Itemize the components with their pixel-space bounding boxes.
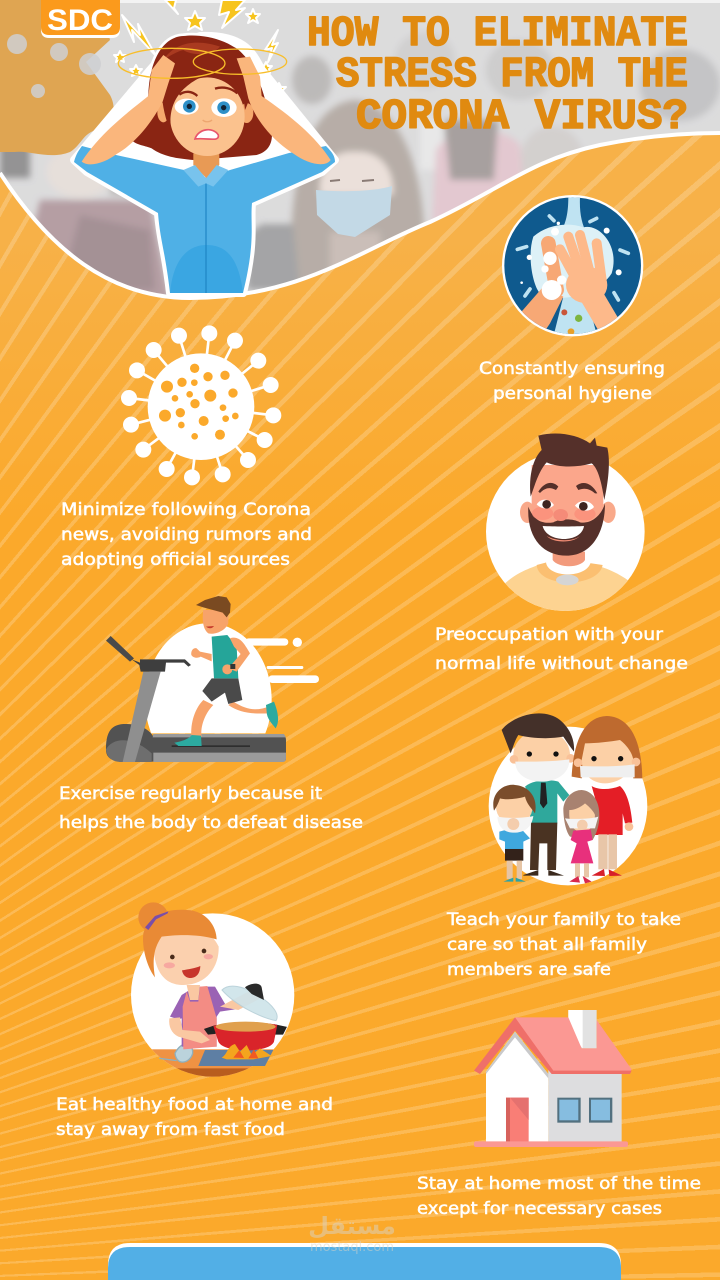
icon: corona virus [122,327,280,484]
dizzy rings [118,48,287,78]
text [56,1095,333,1140]
girl [563,790,599,840]
panel: healthy food [56,902,333,1140]
text [446,910,681,980]
panel: minimize news [61,327,312,570]
text: Constantly ensuring [479,359,665,379]
wave edge [0,133,720,298]
icon: washing hands [502,195,643,338]
icon: dizzy bolts and stars [114,0,286,95]
head [138,902,168,932]
title: STRESS FROM THE [336,50,688,99]
text: care so that all family [447,935,647,955]
panel: stay at home [417,1010,701,1219]
text: Eat healthy food at home and [56,1095,333,1115]
surgical mask [316,186,392,237]
icon: house [474,1010,632,1147]
logo: SDC [41,0,120,38]
ladle [159,1044,193,1062]
text [435,625,688,674]
face [170,77,245,156]
body [170,987,242,1047]
lid [222,986,277,1021]
hair back [130,35,272,160]
boy [499,828,530,849]
watermark: mostaql [308,1212,396,1255]
text [479,359,665,404]
title: CORONA VIRUS? [356,92,688,141]
text: Exercise regularly because it [59,784,322,804]
panel: normal life [435,434,688,674]
watermark: mostaql: mostaql.com [310,1240,394,1255]
text [59,784,363,833]
panel: personal hygiene [479,195,665,404]
haze over the photo [0,0,720,300]
fringe [161,41,252,133]
eyes [175,99,199,115]
footer bar [108,1243,621,1280]
panel: family [446,713,681,980]
logo: SDC: SDC [47,4,113,37]
icon: stressed woman [74,0,335,293]
mouth [195,130,218,139]
icon: smiling bearded man [486,434,645,615]
shirt [74,146,335,293]
pot [205,1025,286,1034]
icon: woman cooking [130,902,297,1080]
text: news, avoiding rumors and [61,525,312,545]
icon: family wearing masks [489,713,647,885]
body outline [74,36,335,293]
text: stay away from fast food [56,1120,285,1140]
panel: exercise [59,596,363,833]
header photo: hazy crowd wearing masks [0,0,720,300]
ears [157,102,169,122]
father [525,780,569,823]
title [307,9,688,141]
text: Stay at home most of the time [417,1174,701,1194]
text: except for necessary cases [417,1199,662,1219]
icon: runner on treadmill [106,596,319,762]
mother [572,716,642,778]
text [417,1174,701,1219]
neck and collar [193,153,219,178]
flames [222,1044,272,1059]
text: adopting official sources [61,550,290,570]
faded orange virus shape [0,0,114,155]
brows [179,88,237,96]
watermark: mostaql: مستقل [308,1212,396,1240]
text: Teach your family to take [446,910,681,930]
text: members are safe [447,960,611,980]
text: Preoccupation with your [435,625,663,645]
text: personal hygiene [493,384,652,404]
text: Minimize following Corona [61,500,311,520]
text: normal life without change [435,654,688,674]
title: HOW TO ELIMINATE [307,9,688,58]
arms and hands [82,55,175,164]
text: helps the body to defeat disease [59,813,363,833]
text [61,500,312,570]
